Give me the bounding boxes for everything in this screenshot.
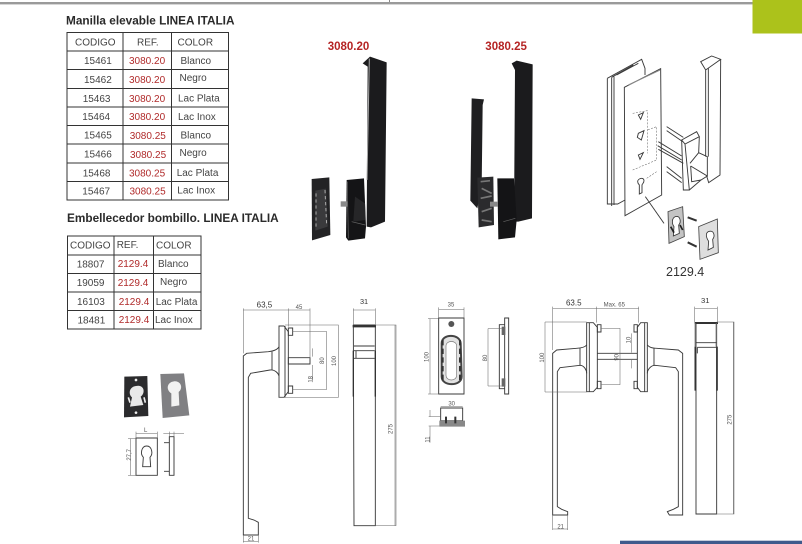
table: manilla codes: 15461 bbox=[84, 56, 112, 67]
table: manilla codes: Lac Plata bbox=[177, 168, 219, 179]
table: manilla codes: Lac Plata bbox=[178, 94, 220, 104]
diagram: rosette with dimensions: 100 bbox=[425, 351, 431, 362]
diagram: handle pair bbox=[540, 299, 683, 530]
table: manilla codes: Negro bbox=[180, 73, 207, 84]
diagram: handle side view left bbox=[243, 301, 338, 543]
photo: escutcheon pieces bbox=[124, 373, 189, 418]
table: embellecedor codes: Blanco bbox=[158, 259, 189, 270]
label: 2129.4: 2129.4 bbox=[666, 265, 704, 279]
diagram: handle pair: Max. 65 bbox=[604, 303, 626, 309]
diagram: handle side view left: 45 bbox=[296, 305, 303, 311]
diagram: rosette with dimensions: 11 bbox=[425, 436, 431, 443]
table: manilla codes: Lac Inox bbox=[177, 186, 215, 196]
photo: handle 3080.25 bbox=[470, 61, 533, 239]
table: manilla codes: 3080.25 bbox=[130, 186, 166, 198]
diagram: handle pair: 21 bbox=[557, 524, 565, 530]
diagram: handle side view left: 18 bbox=[308, 375, 314, 383]
diagram: handle side view left: 80 bbox=[320, 357, 326, 364]
table: embellecedor codes: CODIGO bbox=[70, 241, 111, 252]
diagram: handle front view left: 275 bbox=[388, 423, 394, 434]
diagram: handle pair: 10 bbox=[627, 336, 633, 343]
table: manilla codes: 3080.25 bbox=[130, 150, 167, 161]
table: manilla codes: Blanco bbox=[180, 131, 212, 142]
table: manilla codes: Negro bbox=[180, 148, 207, 159]
diagram: escutcheon drawing: L bbox=[144, 428, 148, 434]
table: embellecedor codes: 2129.4 bbox=[119, 297, 150, 308]
table: embellecedor codes: 2129.4 bbox=[118, 259, 149, 270]
table: manilla codes: Lac Inox bbox=[178, 112, 216, 123]
table: manilla codes: 3080.20 bbox=[129, 94, 166, 105]
table: embellecedor codes: 16103 bbox=[77, 297, 105, 308]
diagram: handle front view right bbox=[695, 296, 734, 514]
diagram: rosette with dimensions: 80 bbox=[483, 354, 489, 361]
diagram: handle pair: 100 bbox=[540, 352, 546, 363]
table: manilla codes: 15462 bbox=[84, 75, 112, 86]
diagram: rosette with dimensions bbox=[425, 303, 509, 443]
diagram: handle side view left: 21 bbox=[248, 537, 255, 543]
diagram: handle pair: 63.5 bbox=[566, 299, 582, 308]
table: embellecedor codes: Lac Inox bbox=[155, 315, 193, 326]
table: manilla codes: 15465 bbox=[84, 131, 112, 142]
table: manilla codes: REF. bbox=[137, 38, 159, 48]
diagram: handle pair: 90 bbox=[614, 353, 620, 361]
table: manilla codes: 15463 bbox=[83, 94, 111, 105]
table: manilla codes: 3080.20 bbox=[129, 56, 166, 67]
diagram: rosette with dimensions: 35 bbox=[448, 303, 455, 309]
table: embellecedor codes: 19059 bbox=[77, 278, 105, 289]
diagram: escutcheon drawing: 27,7 bbox=[127, 448, 133, 461]
table: manilla codes: 3080.25 bbox=[130, 131, 166, 142]
diagram: handle front view left: 31 bbox=[360, 297, 368, 306]
table: embellecedor codes: REF. bbox=[117, 240, 138, 251]
table: embellecedor codes: 2129.4 bbox=[119, 315, 150, 326]
diagram: handle side view left: 63,5 bbox=[257, 301, 273, 310]
diagram: exploded assembly bbox=[607, 56, 721, 259]
table: embellecedor codes bbox=[68, 236, 201, 329]
diagram: handle front view left bbox=[353, 297, 396, 526]
diagram: rosette with dimensions: 30 bbox=[448, 401, 456, 407]
table: manilla codes: 15466 bbox=[84, 150, 112, 160]
table: embellecedor codes: 2129.4 bbox=[118, 278, 149, 289]
heading: manilla: Manilla elevable LINEA ITALIA bbox=[66, 14, 235, 28]
table: manilla codes: CODIGO bbox=[75, 38, 116, 48]
table: embellecedor codes: Negro bbox=[160, 277, 188, 288]
table: manilla codes: 3080.25 bbox=[129, 169, 166, 180]
table: manilla codes: 15468 bbox=[83, 169, 111, 180]
table: manilla codes bbox=[67, 32, 228, 200]
diagram: handle side view left: 100 bbox=[332, 355, 338, 366]
label: 3080.25: 3080.25 bbox=[485, 41, 527, 53]
table: manilla codes: 15467 bbox=[82, 186, 111, 198]
table: manilla codes: Blanco bbox=[180, 56, 212, 67]
photo: handle 3080.20 bbox=[312, 57, 387, 241]
diagram: escutcheon drawing bbox=[127, 428, 184, 475]
green corner block bbox=[752, 0, 802, 34]
table: manilla codes: 3080.20 bbox=[129, 112, 166, 123]
heading: embellecedor: Embellecedor bombillo. LINEA ITALIA bbox=[67, 211, 279, 225]
diagram: handle front view right: 275 bbox=[727, 414, 733, 425]
table: embellecedor codes: 18807 bbox=[77, 259, 105, 270]
table: manilla codes: 15464 bbox=[82, 112, 111, 123]
table: manilla codes: 3080.20 bbox=[129, 75, 166, 86]
table: embellecedor codes: Lac Plata bbox=[156, 297, 198, 308]
table: embellecedor codes: COLOR bbox=[156, 240, 192, 251]
label: 3080.20: 3080.20 bbox=[328, 41, 369, 53]
table: embellecedor codes: 18481 bbox=[78, 316, 106, 326]
table: manilla codes: COLOR bbox=[178, 38, 213, 48]
diagram: handle front view right: 31 bbox=[701, 296, 710, 305]
blue footer bar bbox=[620, 541, 802, 544]
